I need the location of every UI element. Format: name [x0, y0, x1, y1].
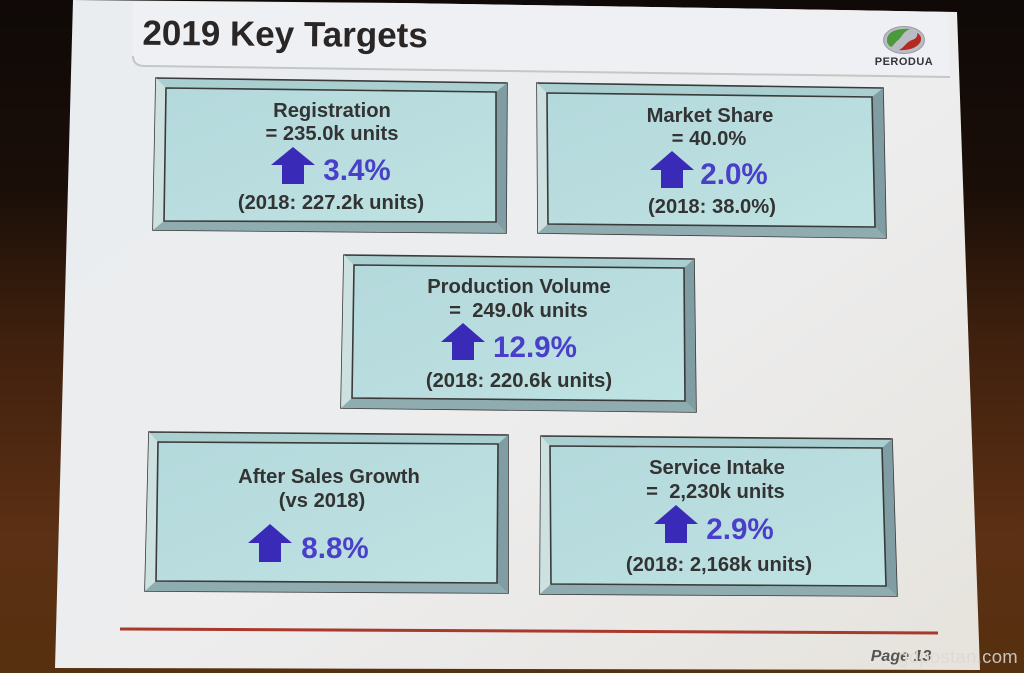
- service intake 2018 value: (2018: 2,168k units): [626, 554, 812, 576]
- panel: after sales growth: [145, 432, 508, 593]
- registration percent: 3.4%: [323, 154, 391, 187]
- logo wordmark: PERODUA: [875, 56, 933, 68]
- icon: up arrow: [441, 323, 485, 360]
- title bar: [133, 2, 950, 77]
- panel: production volume: 249.0k units: [472, 300, 588, 322]
- after sales percent: 8.8%: [301, 532, 369, 565]
- footer divider: [120, 629, 938, 633]
- panel: service intake: =: [646, 481, 658, 503]
- panel: production volume: =: [449, 300, 461, 322]
- panel: market share: [537, 83, 886, 238]
- heading: 2019 Key Targets: [142, 14, 428, 55]
- page number: Page 13: [871, 648, 931, 665]
- panel: registration: [153, 78, 507, 233]
- panel: production volume: [341, 255, 696, 412]
- registration 2018 value: (2018: 227.2k units): [238, 192, 424, 214]
- panel: registration: = 235.0k units: [266, 123, 398, 145]
- production 2018 value: (2018: 220.6k units): [426, 370, 612, 392]
- icon: up arrow: [654, 505, 698, 543]
- service intake percent: 2.9%: [706, 513, 774, 546]
- panel: service intake: 2,230k units: [669, 481, 785, 503]
- logo: Perodua: [875, 26, 933, 68]
- registration text: Registration: [273, 100, 391, 122]
- icon: up arrow: [248, 524, 292, 562]
- icon: up arrow: [650, 151, 694, 188]
- panel: after sales growth: (vs 2018): [279, 490, 365, 512]
- icon: up arrow: [271, 147, 315, 184]
- panel: service intake: [540, 436, 897, 596]
- production percent: 12.9%: [493, 331, 577, 364]
- market share text: Market Share: [647, 105, 773, 127]
- watermark: gdpostan.com: [898, 646, 1018, 667]
- production text: Production Volume: [427, 276, 611, 298]
- panel: market share: = 40.0%: [672, 128, 746, 150]
- service intake text: Service Intake: [649, 457, 785, 479]
- after sales text: After Sales Growth: [238, 466, 420, 488]
- market share percent: 2.0%: [700, 158, 768, 191]
- market share 2018 value: (2018: 38.0%): [648, 196, 776, 218]
